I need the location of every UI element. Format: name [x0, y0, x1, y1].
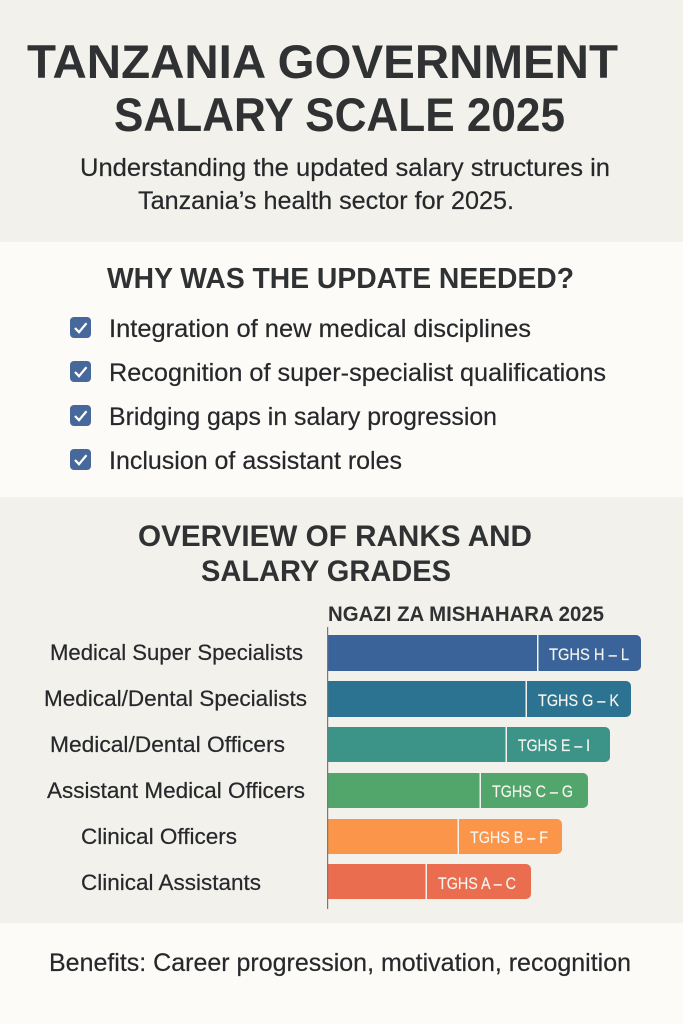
row: clinical assistants — [81, 864, 531, 899]
row: clinical officers — [81, 819, 562, 854]
heading: overview: SALARY GRADES — [201, 555, 451, 588]
item: super-specialist qualifications: Recognition of super-specialist qualifications — [109, 359, 606, 387]
item: salary progression: Bridging gaps in salary progression — [109, 403, 497, 431]
bar chart — [44, 627, 641, 909]
checklist — [70, 315, 606, 475]
row: medical super specialists: Medical Super Specialists — [50, 640, 303, 665]
panel: why the update was needed — [0, 242, 683, 497]
heading: overview — [138, 520, 532, 588]
row: medical super specialists — [50, 635, 641, 671]
row: assistant medical officers: TGHS C – G — [492, 782, 573, 801]
subtitle: Tanzania’s health sector for 2025. — [138, 187, 514, 215]
item: new medical disciplines: Integration of new medical disciplines — [109, 315, 531, 343]
item: assistant roles: Inclusion of assistant roles — [109, 447, 402, 475]
row: clinical officers: TGHS B – F — [470, 828, 548, 847]
row: medical/dental specialists — [44, 681, 631, 717]
heading: why: WHY WAS THE UPDATE NEEDED? — [107, 263, 574, 295]
chart title: NGAZI ZA MISHAHARA 2025 — [328, 603, 604, 626]
panel: ranks and salary grades — [0, 497, 683, 923]
panel: header — [0, 0, 683, 242]
row: medical/dental officers — [50, 727, 610, 762]
row: assistant medical officers: Assistant Medical Officers — [47, 778, 305, 803]
title: SALARY SCALE 2025 — [114, 88, 565, 141]
heading: overview: OVERVIEW OF RANKS AND — [138, 520, 532, 553]
panel: benefits footer — [0, 923, 683, 1024]
row: medical/dental officers: TGHS E – I — [518, 736, 590, 755]
title: TANZANIA GOVERNMENT — [27, 35, 618, 88]
title — [27, 35, 618, 141]
row: clinical officers: Clinical Officers — [81, 824, 237, 849]
subtitle — [80, 154, 610, 215]
subtitle: Understanding the updated salary structures in — [80, 154, 610, 182]
row: medical/dental specialists: TGHS G – K — [538, 691, 620, 710]
row: clinical assistants: Clinical Assistants — [81, 870, 261, 895]
row: medical super specialists: TGHS H – L — [549, 645, 629, 664]
row: assistant medical officers — [47, 773, 588, 808]
row: medical/dental specialists: Medical/Dental Specialists — [44, 686, 307, 711]
benefits text: Benefits: Career progression, motivation, recognition — [49, 949, 631, 977]
row: clinical assistants: TGHS A – C — [438, 874, 516, 893]
row: medical/dental officers: Medical/Dental Officers — [50, 732, 285, 757]
